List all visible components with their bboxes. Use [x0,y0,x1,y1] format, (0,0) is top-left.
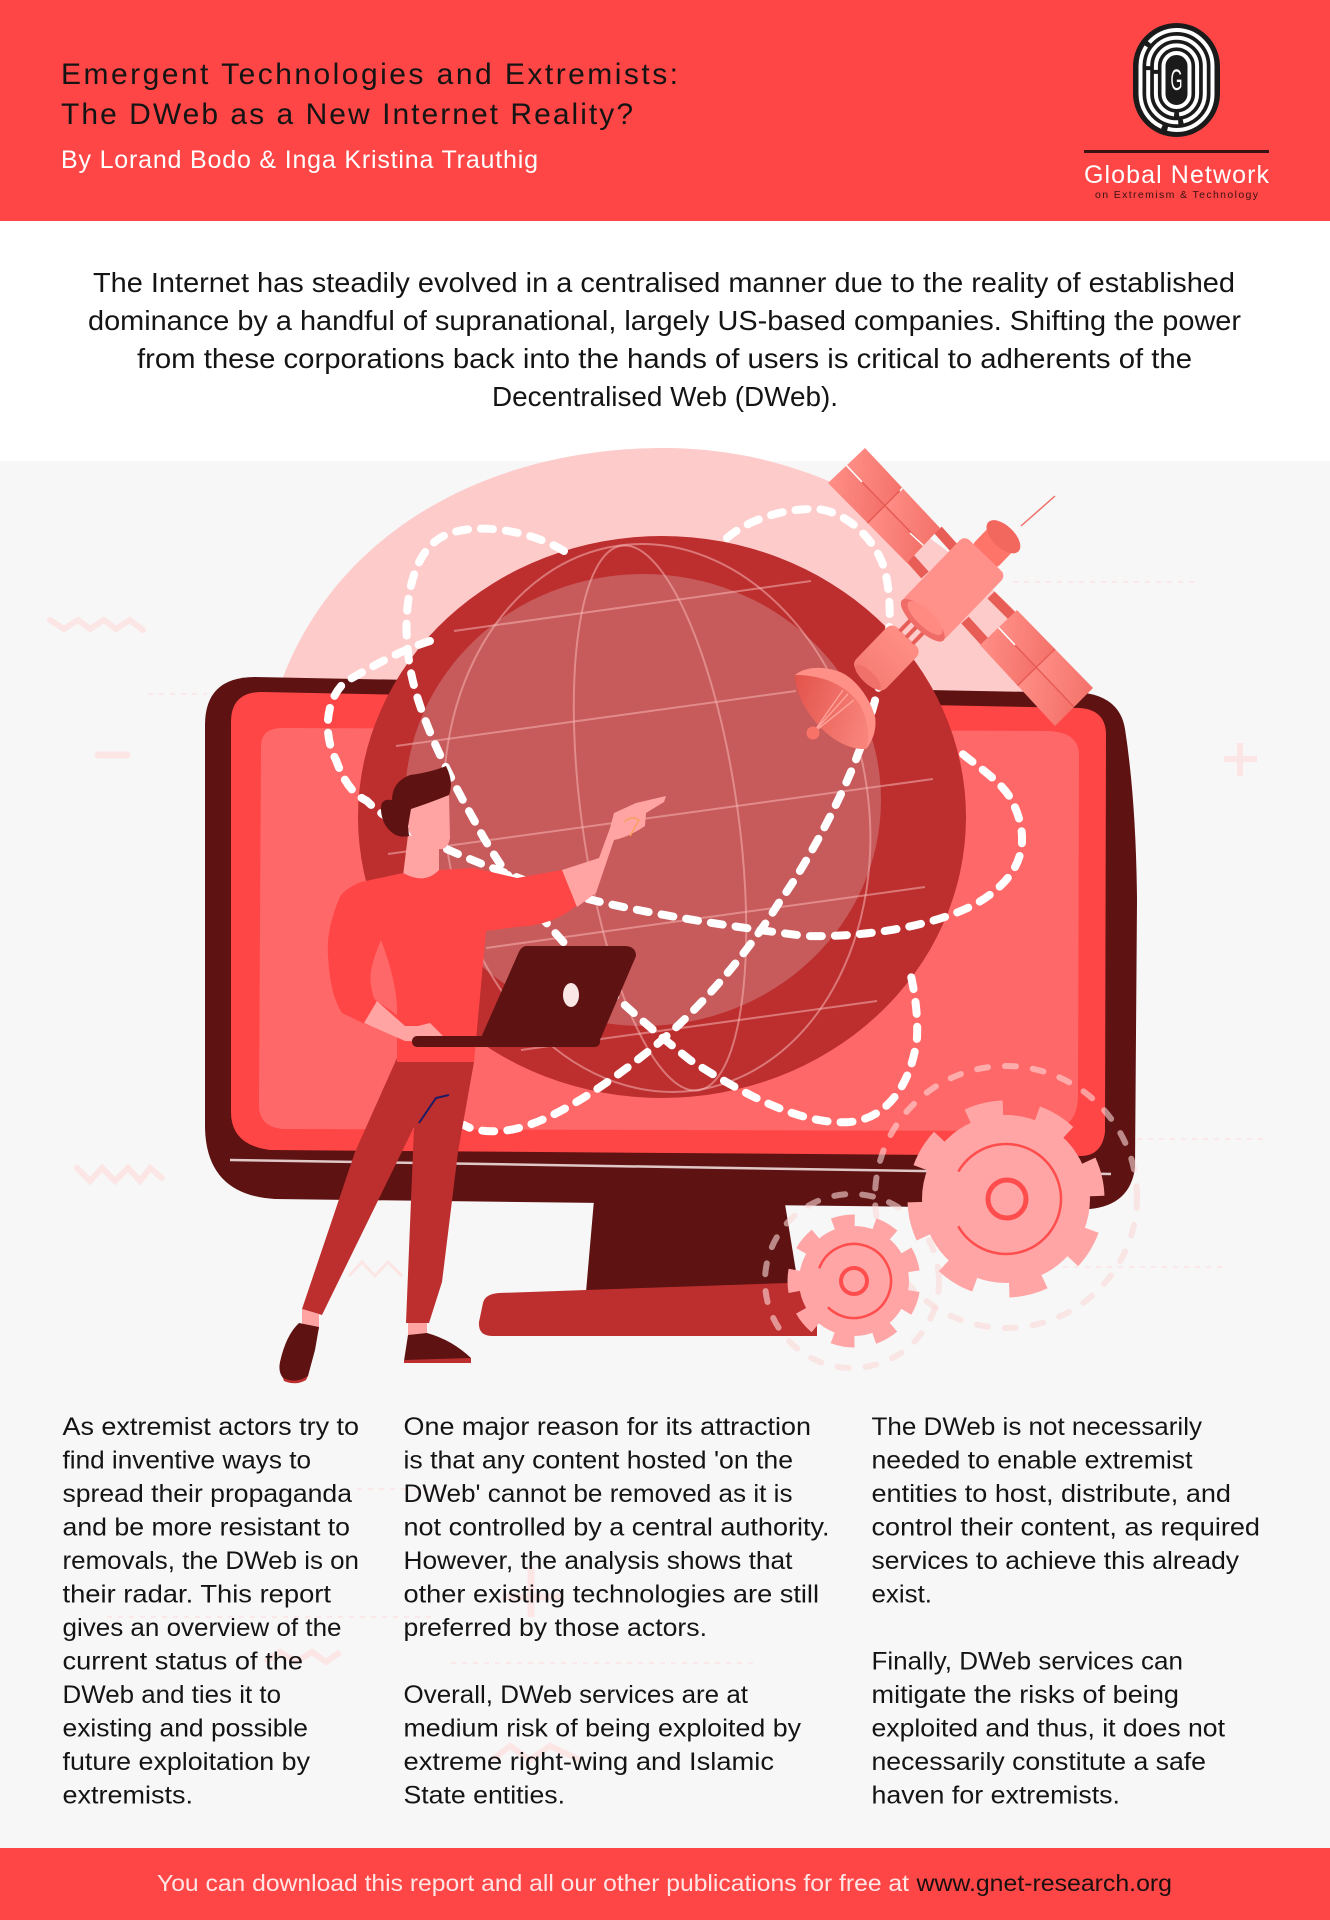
column 1 text: find inventive ways to [62,1446,311,1474]
person ankles [302,1309,427,1340]
column 2 text: State entities. [404,1782,565,1810]
satellite dish [795,668,875,749]
person arm gap [370,940,397,1015]
column 3 text: The DWeb is not necessarily [872,1413,1203,1441]
header band [0,0,1330,221]
footer band [0,1848,1330,1920]
person shoes [279,1323,471,1381]
column 3 text: mitigate the risks of being [872,1681,1179,1709]
title: The DWeb as a New Internet Reality? [61,98,633,131]
title: Emergent Technologies and Extremists: [61,58,678,91]
background decorations [50,582,1267,1760]
column 1 text: existing and possible [62,1714,308,1742]
person raised forearm [562,796,666,907]
column 3 text: needed to enable extremist [872,1446,1193,1474]
logo tagline: on Extremism & Technology [1095,189,1259,201]
globe body [358,536,966,1098]
upper solar panel [828,448,940,563]
person [279,766,666,1383]
column 1 text: extremists. [62,1782,193,1810]
column 2 text: other existing technologies are still [404,1580,819,1608]
laptop [412,946,636,1047]
person face [408,795,450,849]
column 2 text [404,1413,830,1810]
column 2 text: not controlled by a central authority. [404,1514,830,1542]
person hand detail [624,818,639,836]
column 2 text: preferred by those actors. [404,1614,707,1642]
globe [358,516,966,1120]
monitor frame [205,677,1137,1209]
globe light area [405,574,881,1026]
small gear [785,1212,923,1350]
monitor screen [259,728,1079,1131]
dashed gear circles [765,1066,1137,1368]
person neck [403,835,439,882]
dashed orbits [328,509,1022,1131]
intro text: from these corporations back into the hands of users is critical to adherents of the [137,343,1192,374]
person lower arm [364,1001,449,1042]
column 2 text: However, the analysis shows that [404,1547,793,1575]
column 2 text: One major reason for its attraction [404,1413,811,1441]
footer text: You can download this report and all our other publications for free at [157,1870,910,1896]
logo name: Global Network [1084,161,1270,189]
column 2 text: Overall, DWeb services are at [404,1681,748,1709]
column 3 text: entities to host, distribute, and [872,1480,1231,1508]
person trousers [302,1058,474,1323]
intro text: Decentralised Web (DWeb). [492,381,838,412]
monitor stand [586,1200,799,1292]
column 1 text: spread their propaganda [62,1480,352,1508]
illustration background [0,461,1330,1848]
column 3 text: Finally, DWeb services can [872,1648,1183,1676]
column 3 text: services to achieve this already [872,1547,1240,1575]
column 3 text: haven for extremists. [872,1782,1120,1810]
column 3 text: control their content, as required [872,1514,1260,1542]
pink background blob [283,448,1061,700]
column 1 text: removals, the DWeb is on [62,1547,359,1575]
shoe soles [283,1358,471,1383]
monitor [205,677,1137,1336]
column 1 text: their radar. This report [62,1580,331,1608]
footer link: www.gnet-research.org [915,1870,1172,1896]
monitor screen edge [231,692,1106,1156]
column 1 text: As extremist actors try to [62,1413,359,1441]
column 1 text: DWeb and ties it to [62,1681,281,1709]
column 3 text [872,1413,1260,1810]
intro text: The Internet has steadily evolved in a centralised manner due to the reality of established [93,267,1235,298]
column 2 text: DWeb' cannot be removed as it is [404,1480,792,1508]
monitor highlight line [230,1160,1111,1174]
person hair [381,766,451,837]
column 1 text: current status of the [62,1648,303,1676]
logo divider [1084,150,1269,153]
person torso [328,868,577,1062]
column 1 text: future exploitation by [62,1748,311,1776]
logo: fingerprint: G [1170,64,1182,97]
column 3 text: exploited and thus, it does not [872,1714,1225,1742]
column 2 text: medium risk of being exploited by [404,1714,802,1742]
column 1 text: gives an overview of the [62,1614,342,1642]
column 3 text: necessarily constitute a safe [872,1748,1206,1776]
column 1 text: and be more resistant to [62,1514,350,1542]
large gear [891,1084,1121,1314]
satellite [795,448,1093,749]
satellite body [843,509,1032,702]
intro text: dominance by a handful of supranational, largely US-based companies. Shifting the power [88,305,1241,336]
title [61,58,678,131]
globe grid lines [388,516,933,1120]
column 2 text: is that any content hosted 'on the [404,1446,793,1474]
authors: By Lorand Bodo & Inga Kristina Trauthig [61,146,538,174]
person pocket line [419,1095,449,1123]
intro text [88,267,1241,412]
column 3 text: exist. [872,1580,932,1608]
column 2 text: extreme right-wing and Islamic [404,1748,774,1776]
logo: fingerprint [1133,23,1220,137]
lower solar panel [980,610,1093,726]
column 1 text [62,1413,359,1810]
monitor base [479,1282,817,1336]
satellite truss [908,530,1014,642]
satellite antenna [1021,496,1055,526]
